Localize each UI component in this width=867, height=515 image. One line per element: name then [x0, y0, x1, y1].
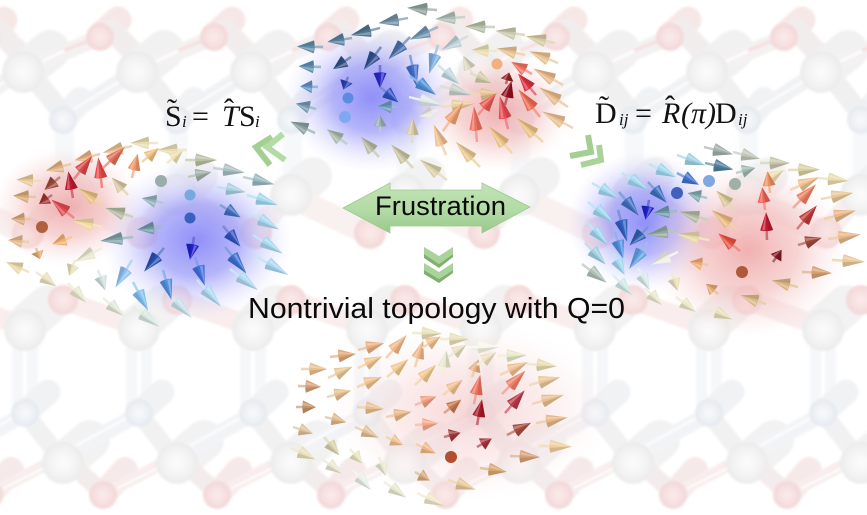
equation: spin transformation: ˆ: [224, 93, 234, 126]
equation: spin transformation: T: [222, 100, 241, 133]
equation: DMI transformation: [595, 90, 748, 130]
panel: top skyrmion pair: [284, 1, 576, 185]
heading: Nontrivial topology: Nontrivial topology with Q=0: [248, 293, 625, 325]
equation: spin transformation: [165, 93, 260, 133]
heading: Frustration: Frustration: [375, 191, 506, 221]
equation: spin transformation: S: [239, 100, 256, 133]
equation: DMI transformation: ij: [619, 110, 629, 129]
equation: DMI transformation: D: [715, 97, 737, 130]
equation: spin transformation: S: [165, 100, 182, 133]
arrow: frustration double arrow: [343, 183, 530, 233]
equation: DMI transformation: (π): [681, 97, 716, 130]
panel: bottom topological texture: [288, 322, 615, 512]
equation: DMI transformation: ˆ: [665, 90, 675, 123]
equation: spin transformation: i: [182, 112, 187, 131]
equation: spin transformation: i: [255, 112, 260, 131]
icon: double chevron, left: [256, 134, 285, 165]
equation: DMI transformation: R: [661, 97, 680, 130]
equation: DMI transformation: =: [635, 97, 652, 130]
equation: DMI transformation: ij: [738, 110, 748, 129]
equation: DMI transformation: ˜: [599, 90, 609, 123]
equation: spin transformation: =: [192, 100, 209, 133]
equation: DMI transformation: D: [595, 97, 617, 130]
icon: double chevron, down: [424, 247, 453, 283]
equation: spin transformation: ˜: [167, 93, 177, 126]
panel: right skyrmion pair: [567, 141, 865, 338]
icon: double chevron, right: [570, 135, 601, 165]
panel: left skyrmion pair: [0, 136, 292, 332]
